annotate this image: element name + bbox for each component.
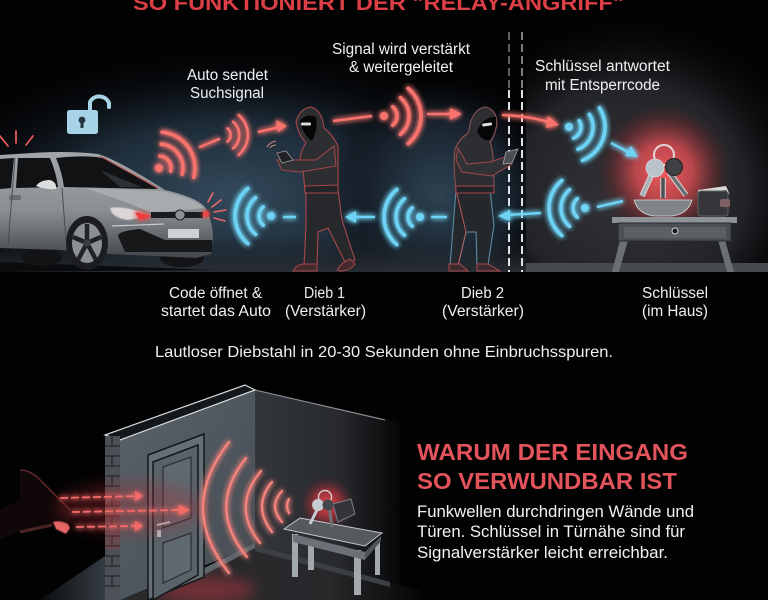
blue signal waves and arrows (235, 103, 638, 245)
heading: warum der eingang: SO VERWUNDBAR IST (417, 468, 678, 494)
heading: warum der eingang: WARUM DER EINGANG (417, 439, 688, 465)
door handle (9, 195, 21, 200)
key glow (298, 475, 356, 533)
shoes (449, 264, 500, 271)
label: auto sendet: Auto sendet (187, 67, 269, 84)
car (0, 131, 226, 272)
thief 1 (267, 107, 355, 271)
wave from key (549, 180, 577, 236)
front sparks (208, 193, 226, 221)
label: schluessel antwortet: mit Entsperrcode (545, 77, 660, 94)
arrow through wall (502, 115, 552, 123)
windshield highlights (100, 170, 142, 187)
hoodie (454, 107, 497, 190)
wave thief 2 to thief 1 (384, 189, 412, 245)
key glow (592, 100, 736, 244)
mirror (36, 180, 56, 189)
floor (40, 556, 105, 600)
red signal waves and arrows (149, 88, 559, 186)
hood reflection (84, 188, 204, 213)
headlight (110, 207, 151, 220)
face (300, 116, 316, 141)
red floor glow (155, 576, 255, 600)
label: schluessel antwortet: Schlüssel antwortet (535, 58, 671, 75)
legs (304, 190, 355, 266)
label: signal wird verstaerkt: Signal wird verstärkt (332, 41, 471, 58)
label: dieb 2: (Verstärker) (442, 303, 524, 320)
label: dieb 2: Dieb 2 (461, 285, 504, 302)
bowl (634, 200, 692, 216)
keys (310, 490, 334, 527)
red glow behind arrows (55, 482, 205, 534)
arm (456, 148, 512, 176)
label: schluessel: (im Haus) (642, 303, 708, 320)
front wheel (66, 216, 108, 270)
key bunch (642, 158, 686, 198)
line to wave 3 (333, 116, 372, 121)
background glow: street and room (0, 44, 768, 272)
phone (503, 149, 518, 164)
legs (450, 190, 494, 266)
wave to key (568, 103, 612, 164)
wave 2 (228, 115, 248, 155)
label: signal wird verstaerkt: & weitergeleitet (349, 59, 454, 76)
caption: Lautloser Diebstahl in 20-30 Sekunden ohne Einbruchsspuren. (155, 344, 613, 361)
radio wave arcs (203, 442, 289, 573)
wave to car (235, 188, 263, 244)
arrow to thief 2 (427, 113, 454, 115)
small phone signal (267, 141, 276, 148)
right wall (255, 390, 400, 585)
shoes (293, 259, 355, 271)
car silhouette (0, 470, 72, 540)
house wall dashed boundary (509, 32, 522, 272)
wallet (698, 186, 730, 216)
grille (151, 212, 203, 218)
car windows (0, 156, 158, 189)
dashed signal arrows (60, 491, 190, 531)
bottom labels (161, 285, 708, 320)
wall top (105, 385, 255, 440)
wave 3 (393, 88, 421, 144)
wave 1 from car (149, 125, 204, 186)
side table (284, 518, 382, 595)
licence plate (168, 229, 199, 238)
label: code oeffnet: startet das Auto (161, 303, 271, 320)
arm (277, 146, 336, 172)
arrow to thief 2 (506, 213, 541, 215)
door frame (148, 434, 204, 600)
bumper (118, 229, 212, 252)
icon: open padlock (67, 96, 109, 134)
door leaf (153, 445, 198, 600)
hoodie (296, 107, 338, 192)
body text: Funkwellen durchdringen Wände und (417, 503, 694, 521)
roof warning sparks (0, 131, 33, 146)
label: schluessel: Schlüssel (642, 285, 708, 302)
room floor skirting (526, 263, 768, 272)
label: dieb 1: Dieb 1 (304, 285, 345, 302)
door seams (8, 158, 66, 245)
front wall (120, 390, 255, 600)
arrow to thief 1 (258, 127, 280, 132)
label: code oeffnet: Code öffnet & (169, 285, 263, 302)
brick edge (105, 436, 120, 600)
keys on bowl and table (612, 145, 737, 272)
table (612, 217, 737, 272)
key ring (654, 145, 674, 165)
red roof edge (100, 156, 158, 188)
body text: Türen. Schlüssel in Türnähe sind für (417, 523, 686, 541)
thief 2 (449, 107, 518, 271)
under-car shadow (0, 262, 215, 272)
body text: Signalverstärker leicht erreichbar. (417, 544, 668, 562)
face (477, 117, 496, 140)
door handle (157, 522, 170, 525)
wallet (333, 499, 355, 522)
label: auto sendet: Suchsignal (190, 85, 264, 102)
car body (0, 152, 213, 258)
label: dieb 1: (Verstärker) (285, 303, 366, 320)
illustration: door scene (0, 385, 420, 600)
